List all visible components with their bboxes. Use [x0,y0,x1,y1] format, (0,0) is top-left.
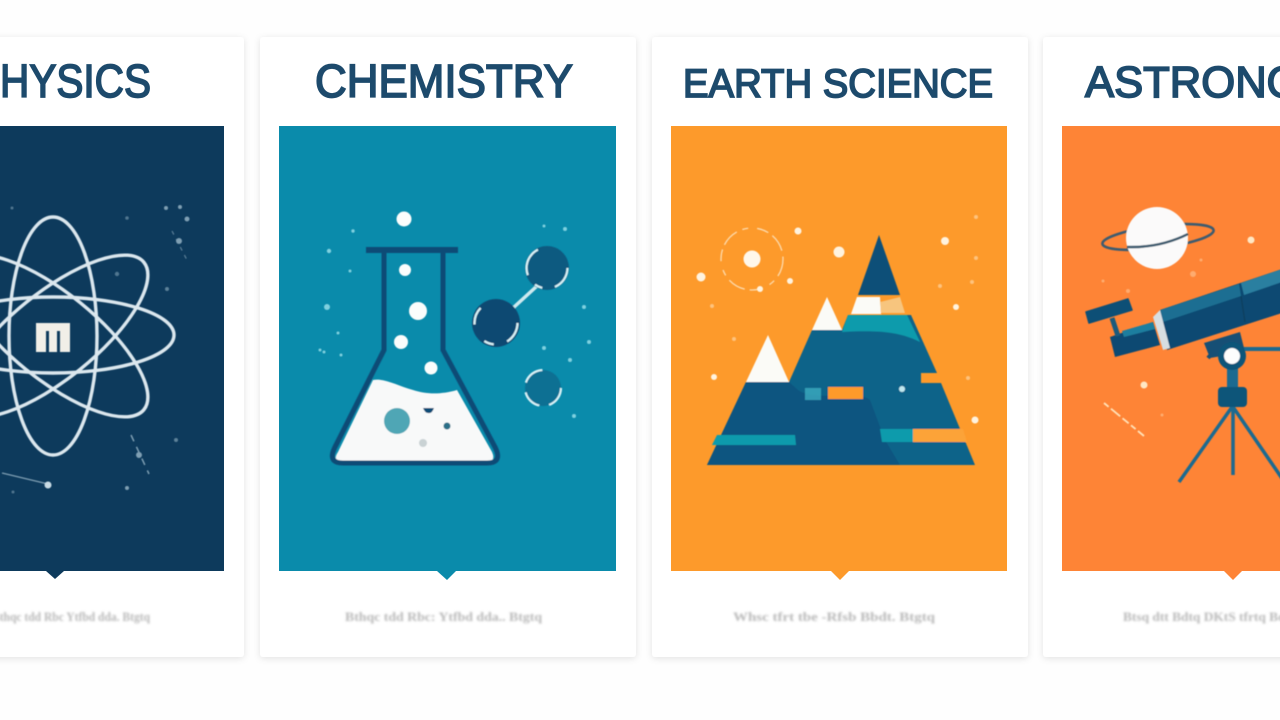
tripod legs [1179,407,1280,490]
mountain teal band [842,315,920,342]
side arm [1240,347,1280,351]
stars [1102,236,1254,436]
flask outline [332,250,498,463]
earth science illustration panel [671,126,1007,571]
mount [1204,332,1245,358]
caption: chemistry: Bthqc tdd Rbc: Ytfbd dda.. Btgtq [345,609,543,624]
main tube [1160,268,1280,350]
icon: atom nucleus [36,323,70,352]
mountain shaded lower left [707,382,900,465]
icon: mountains [707,235,975,465]
panel pointer [437,571,456,580]
eyepiece [1110,322,1160,357]
snow peak upper [812,297,842,330]
panel pointer [1224,571,1242,580]
astronomy illustration panel [1062,126,1280,571]
tripod neck and head [1227,368,1238,390]
chemistry illustration panel [279,126,616,571]
bubbles in liquid [384,408,450,447]
finder stem [1112,318,1118,336]
panel pointer [46,571,64,579]
constellations and stars [2,205,190,494]
bubbles [394,212,438,374]
strata [712,435,796,445]
heading: earth science: EARTH SCIENCE [683,62,993,106]
caption: earth science: Whsc tfrt tbe -Rfsb Bbdt. Btgtq [733,609,936,624]
astronomy card background [1043,37,1280,657]
earth science card background [652,37,1028,657]
stars [696,215,978,424]
snow peak lower [746,335,789,382]
panel: physics [0,37,244,657]
physics card background [0,37,244,657]
icon: telescope [1086,268,1280,490]
icon: atom [0,217,174,455]
panel: astronomy [1043,37,1280,657]
flask liquid [336,380,493,461]
panel: earth science [652,37,1028,657]
silver ring [1153,310,1170,350]
panel pointer [831,571,849,580]
icon: molecules [472,246,569,406]
finder scope [1086,299,1132,323]
upper peak [858,235,900,295]
chemistry card background [260,37,636,657]
sand band [880,297,905,313]
heading: chemistry: CHEMISTRY [315,55,573,107]
mountain body [707,315,975,465]
flask lip [366,247,458,253]
icon: flask [332,212,498,463]
icon: ringed planet [1101,207,1215,269]
panel: chemistry [260,37,636,657]
icon: sun with orbit [721,228,783,290]
physics illustration panel [0,126,224,571]
stars [318,224,591,418]
snow band [851,297,881,314]
